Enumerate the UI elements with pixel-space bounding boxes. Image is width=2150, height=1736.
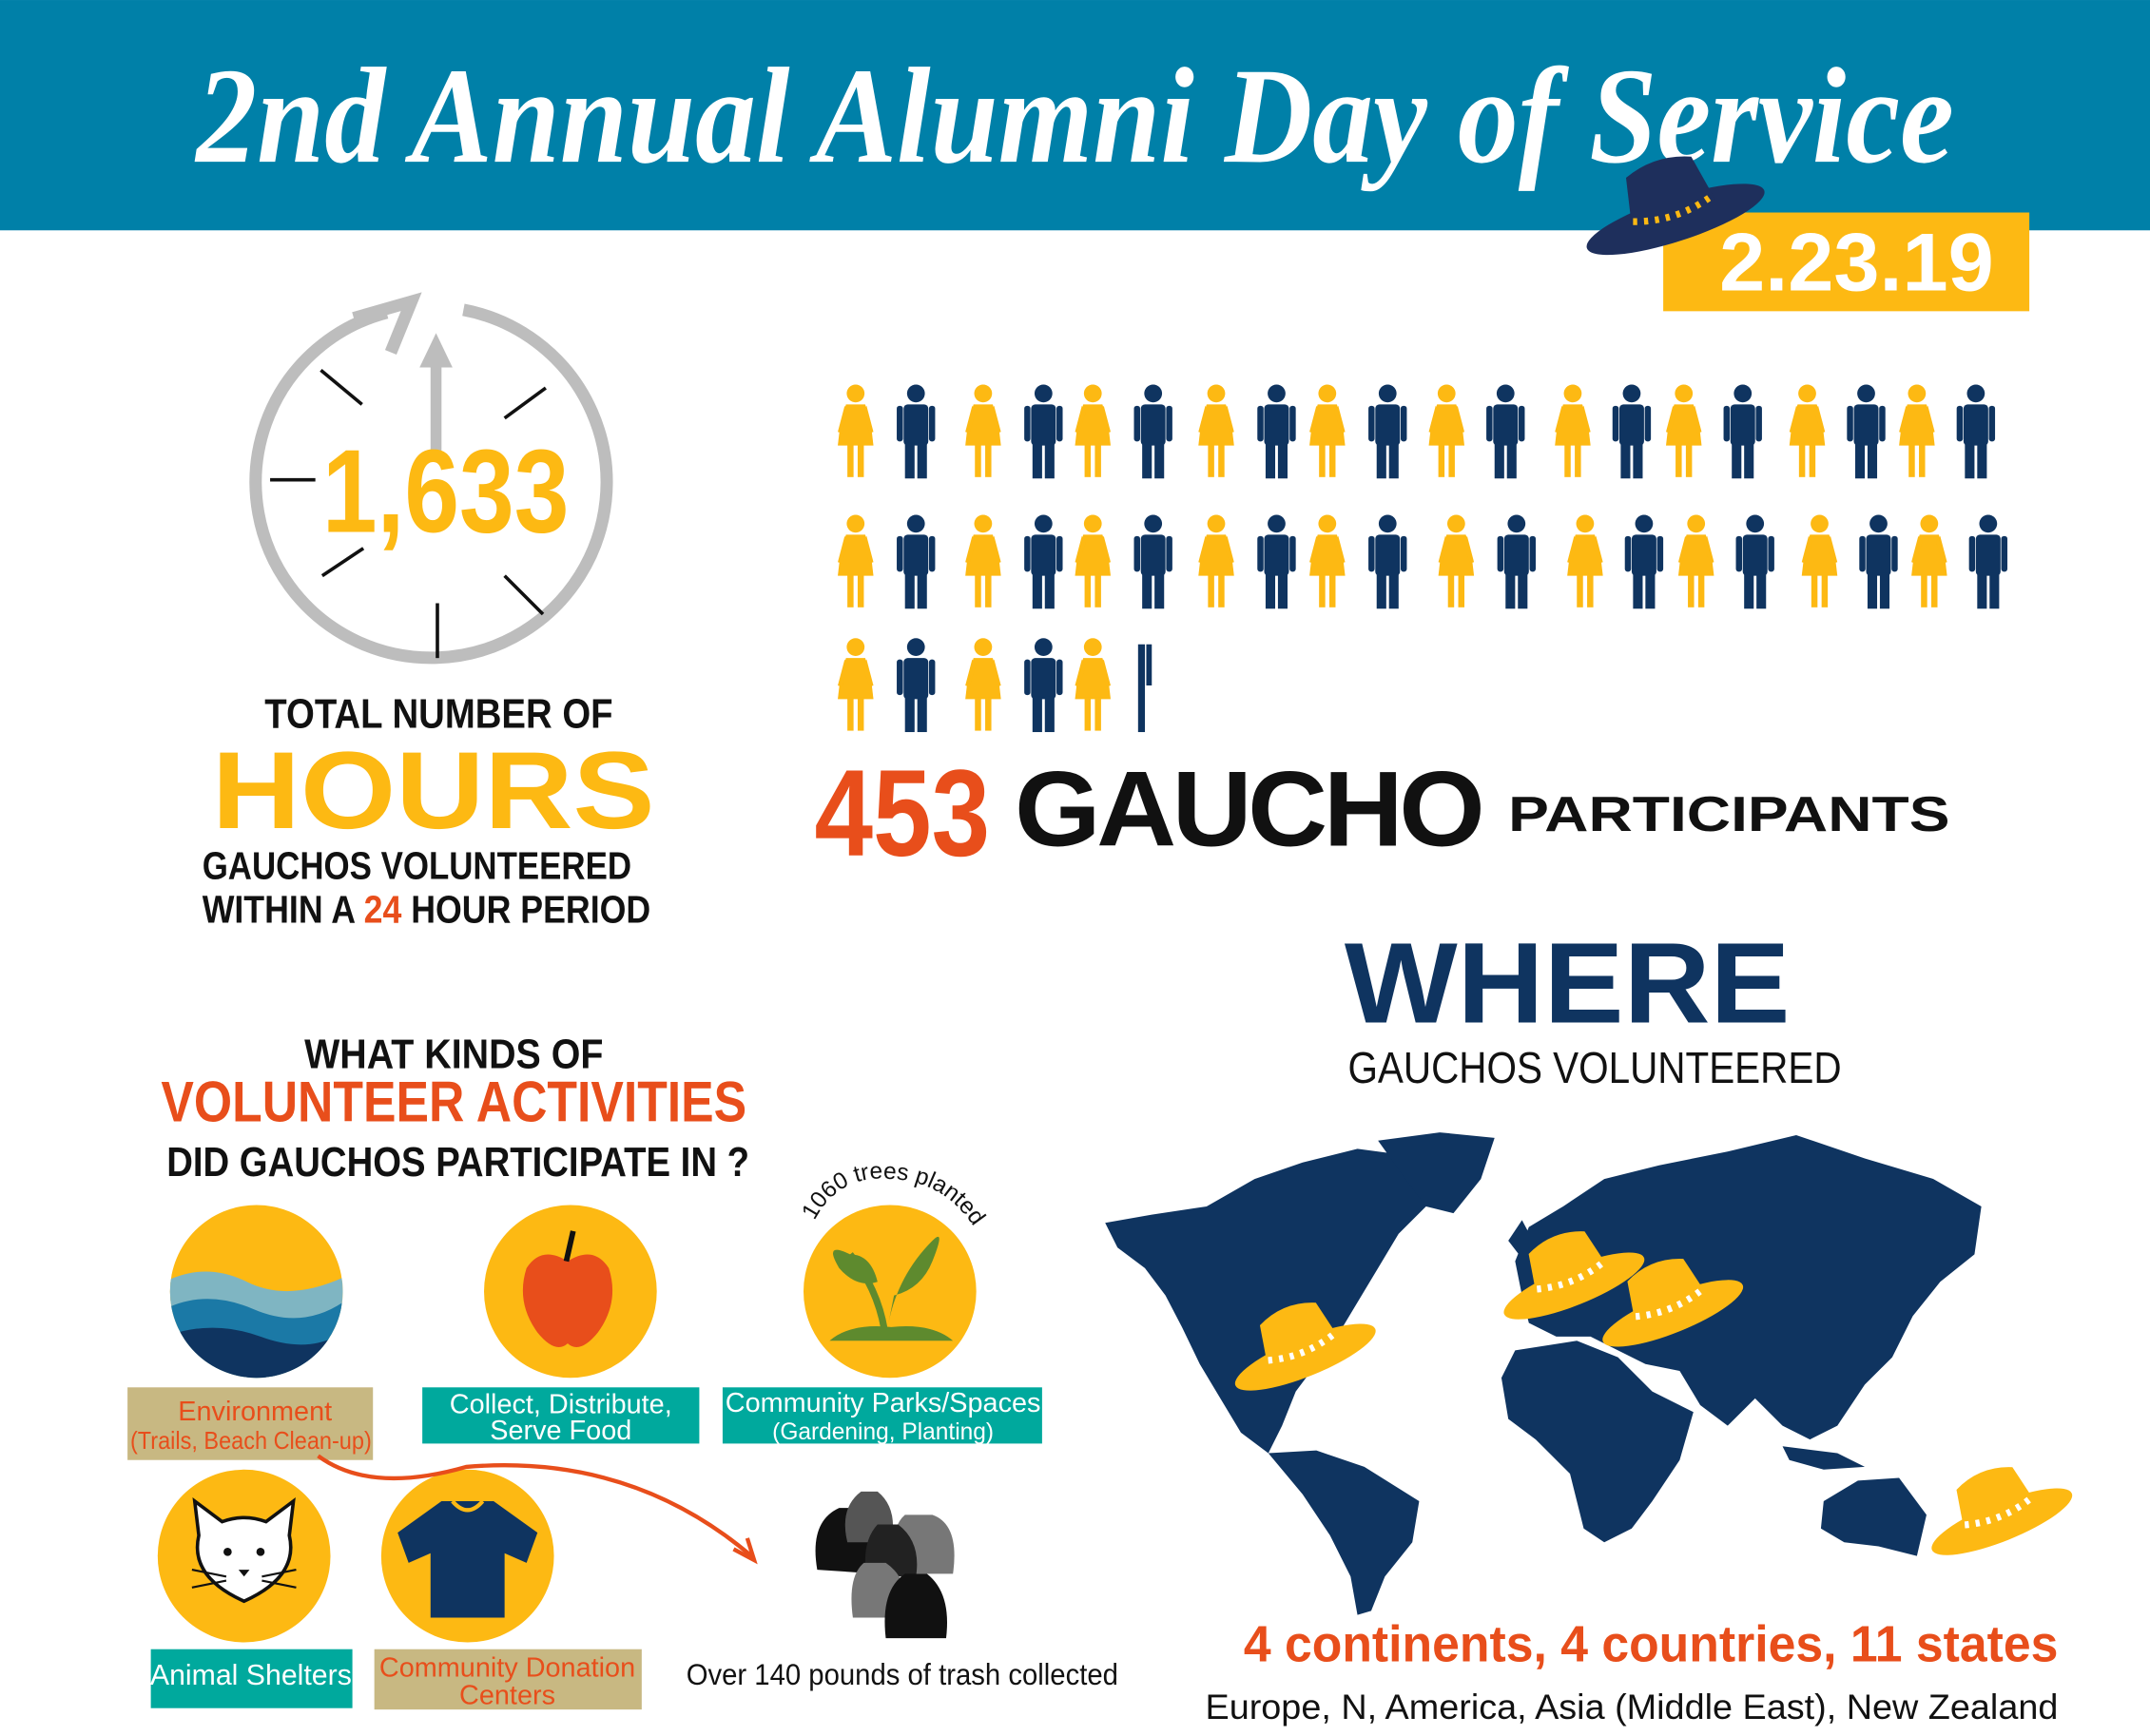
where heading: GAUCHOS VOLUNTEERED: [1347, 1043, 1842, 1092]
icon: environment waves: [165, 1206, 342, 1384]
date box: 2.23.19: [1719, 218, 1994, 309]
label: environment: [127, 1387, 373, 1460]
label: environment: Environment: [178, 1397, 332, 1427]
participants heading: 453: [815, 744, 990, 882]
label: environment: (Trails, Beach Clean-up): [130, 1428, 372, 1455]
activities heading: [161, 1032, 749, 1186]
where heading: WHERE: [1345, 918, 1790, 1048]
label: animal shelters: [150, 1649, 353, 1708]
clock number: 1,633: [322, 427, 569, 558]
label: animal shelters: Animal Shelters: [150, 1660, 352, 1691]
activities heading: DID GAUCHOS PARTICIPATE IN ?: [166, 1140, 749, 1186]
arrow: [319, 1456, 754, 1560]
clock: [256, 301, 607, 658]
label: food: Collect, Distribute,: [450, 1390, 672, 1420]
hours text block: GAUCHOS VOLUNTEERED: [203, 843, 631, 887]
label: donation centers: Community Donation: [379, 1653, 635, 1684]
label: parks: Community Parks/Spaces: [726, 1388, 1040, 1418]
where stats: [1205, 1617, 2058, 1726]
label: donation centers: Centers: [459, 1680, 555, 1710]
label: parks: [723, 1387, 1042, 1445]
label: food: [422, 1387, 699, 1446]
header band: [0, 0, 2150, 230]
participants heading: [815, 744, 1949, 882]
icon: apple: [484, 1206, 657, 1378]
hours text block: TOTAL NUMBER OF: [264, 692, 613, 738]
icon: cat: [158, 1470, 331, 1642]
label: donation centers: [375, 1649, 642, 1710]
where heading: [1345, 918, 1842, 1092]
where stats: 4 continents, 4 countries, 11 states: [1244, 1617, 2058, 1673]
hours text block: [203, 692, 655, 931]
icons: map hats: [1215, 1208, 2079, 1568]
participants heading: PARTICIPANTS: [1508, 787, 1949, 842]
hours text block: WITHIN A 24 HOUR PERIOD: [203, 887, 650, 931]
title: 2nd Annual Alumni Day of Service: [194, 41, 1954, 192]
icon: plant: 1060 trees planted: [804, 1166, 987, 1225]
label: food: Serve Food: [490, 1416, 631, 1446]
hours text block: HOURS: [212, 730, 655, 852]
icon: shirt: [381, 1470, 554, 1642]
date box: [1663, 213, 2029, 311]
activities heading: VOLUNTEER ACTIVITIES: [161, 1070, 746, 1134]
people icons: [838, 384, 2007, 732]
participants heading: GAUCHO: [1015, 749, 1481, 869]
activities heading: WHAT KINDS OF: [304, 1032, 603, 1077]
icon: plant: [804, 1166, 987, 1379]
icon: header hat: [1568, 132, 1771, 269]
where stats: Europe, N, America, Asia (Middle East), New Zealand: [1205, 1687, 2058, 1726]
icon: trash bags: [816, 1492, 955, 1638]
label: parks: (Gardening, Planting): [772, 1419, 994, 1445]
trash caption: Over 140 pounds of trash collected: [687, 1657, 1118, 1691]
world map: [1105, 1132, 1982, 1615]
